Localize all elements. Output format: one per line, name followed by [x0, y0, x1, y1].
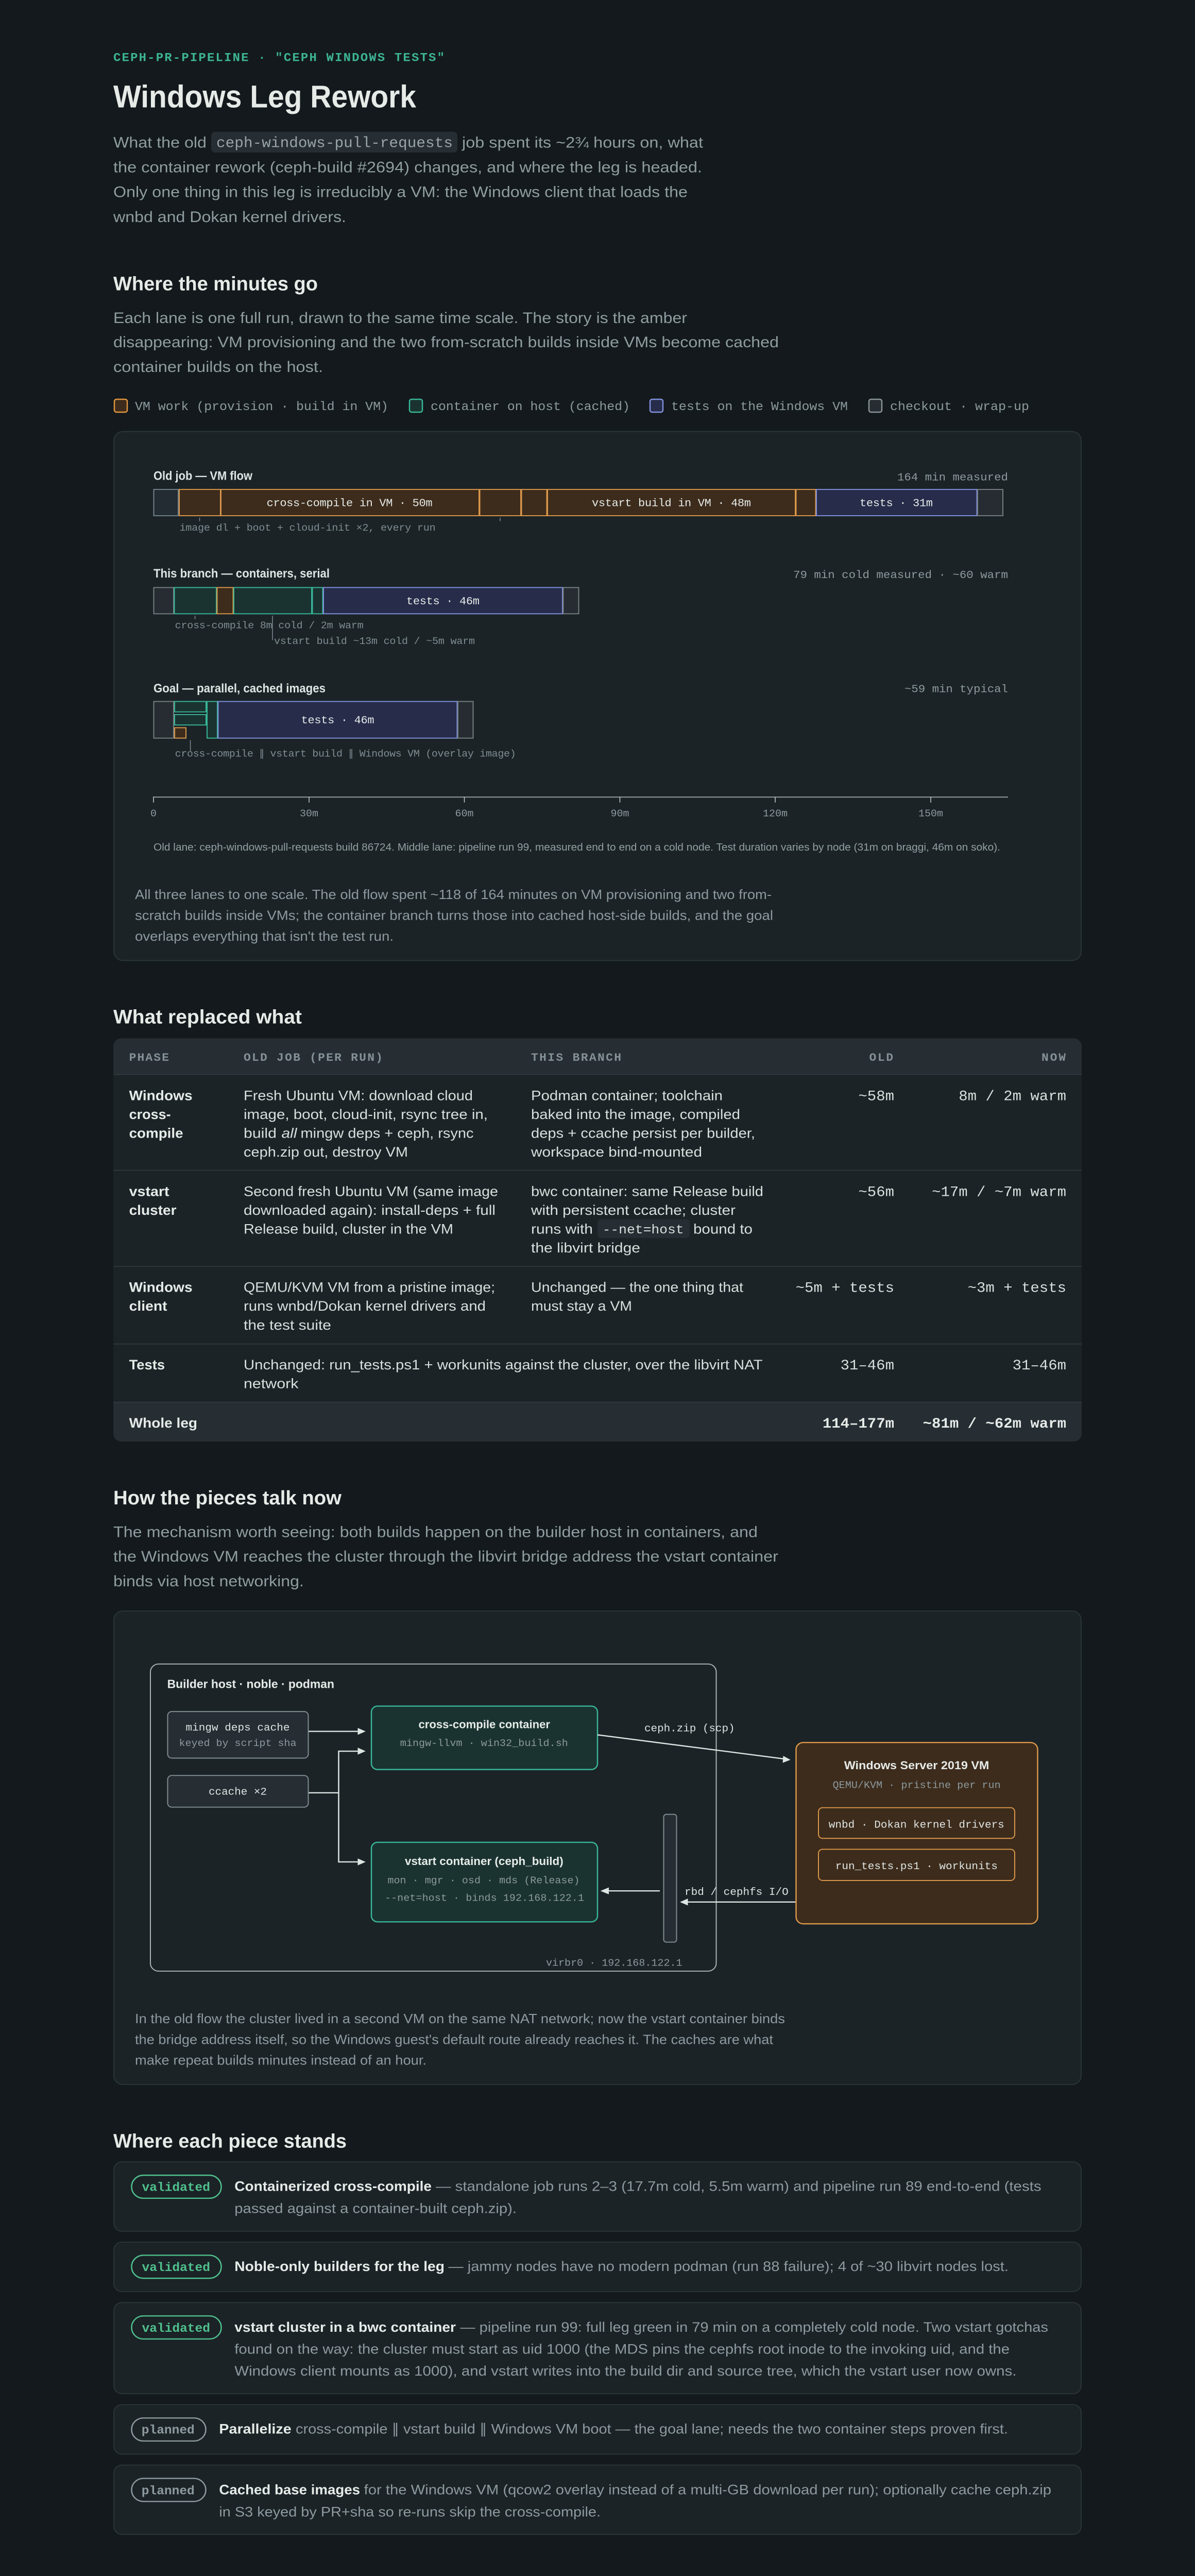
row: vstart cluster: Release build, cluster in the VM: [244, 1222, 453, 1237]
row: vstart cluster: runs with: [531, 1222, 593, 1237]
row: Windows cross-compile: Fresh Ubuntu VM: download cloud: [244, 1088, 473, 1103]
status card: containerized cross-compile: [114, 2162, 1081, 2231]
heading: Where the minutes go: [113, 273, 318, 295]
status card: vstart cluster in bwc container: — pipeline run 99: full leg green in 79 min on a completely cold node. Two vstart gotchas: [460, 2319, 1048, 2335]
status card: noble-only builders: Noble-only builders for the leg: [234, 2259, 445, 2274]
status card: containerized cross-compile: validated: [142, 2181, 210, 2195]
table header row: [129, 1052, 1066, 1064]
diagram caption: make repeat builds minutes instead of an hour.: [135, 2053, 426, 2068]
section intro text: disappearing: VM provisioning and the two from-scratch builds inside VMs become cached: [113, 334, 779, 351]
intro paragraph: wnbd and Dokan kernel drivers.: [113, 208, 346, 226]
cross-compile container box: [371, 1706, 598, 1770]
lane: goal: ~59 min typical: [904, 683, 1008, 696]
cross-compile container box: mingw-llvm · win32_build.sh: [400, 1738, 568, 1749]
lane: this branch: vstart build ~13m cold / ~5m warm: [274, 636, 475, 647]
lane: goal: tests · 46m: [301, 715, 374, 727]
panel: architecture diagram: [114, 1611, 1081, 2084]
row: vstart cluster: cluster: [129, 1203, 177, 1218]
vstart container box: --net=host · binds 192.168.122.1: [385, 1893, 584, 1904]
status card: cached base images: planned: [142, 2485, 195, 2498]
builder host box: [150, 1664, 716, 1971]
status card: noble-only builders: — jammy nodes have no modern podman (run 88 failure); 4 of ~30 libvirt nodes lost.: [448, 2259, 1009, 2274]
row: Windows cross-compile: build: [244, 1126, 277, 1141]
lane: old job: [153, 469, 1008, 534]
wnbd driver box: [818, 1808, 1015, 1838]
intro paragraph: What the old: [113, 134, 207, 151]
table header row: NOW: [1042, 1052, 1066, 1064]
table header row: OLD JOB (PER RUN): [244, 1052, 383, 1064]
ccache box: [168, 1775, 308, 1807]
lane: this branch: This branch — containers, serial: [153, 567, 330, 581]
row: tests: network: [244, 1376, 299, 1392]
lane: goal: cross-compile ∥ vstart build ∥ Windows VM (overlay image): [175, 749, 516, 759]
row: Windows cross-compile: all: [281, 1126, 298, 1141]
status card: vstart cluster in bwc container: validated: [142, 2322, 210, 2336]
diagram caption: [135, 2011, 785, 2068]
row: vstart cluster: the libvirt bridge: [531, 1241, 640, 1256]
arrow: bridge to vstart container: [601, 1887, 660, 1894]
status card: cached base images: for the Windows VM (qcow2 overlay instead of a multi-GB download per run); optionally cache ceph.zip: [364, 2482, 1051, 2497]
status card: vstart cluster in bwc container: [114, 2302, 1081, 2394]
section intro text: [113, 309, 779, 376]
legend: container on host (cached): [431, 401, 630, 414]
section: what replaced what: [113, 1006, 1082, 1442]
vstart container box: vstart container (ceph_build): [405, 1855, 564, 1868]
status card: containerized cross-compile: Containerized cross-compile: [234, 2178, 432, 2194]
status card: parallelize: Parallelize: [219, 2421, 292, 2436]
intro paragraph: [113, 132, 704, 226]
status card: containerized cross-compile: — standalone job runs 2–3 (17.7m cold, 5.5m warm) and pipeline run 89 end-to-end (tests: [436, 2178, 1042, 2194]
row: Windows client: runs wnbd/Dokan kernel drivers and: [244, 1299, 486, 1314]
legend: [114, 399, 1029, 414]
arrow: ceph.zip scp to Windows VM: ceph.zip (scp): [644, 1723, 735, 1735]
heading: What replaced what: [113, 1006, 302, 1028]
row: vstart cluster: Second fresh Ubuntu VM (same image: [244, 1184, 498, 1199]
row: tests: [129, 1358, 1066, 1392]
time axis: 30m: [300, 808, 318, 819]
intro paragraph: Only one thing in this leg is irreducibly a VM: the Windows client that loads the: [113, 183, 688, 201]
legend: tests on the Windows VM: [671, 401, 848, 414]
comparison table: [113, 1038, 1082, 1442]
status card: vstart cluster in bwc container: found on the way: the cluster must start as uid 1000 (the MDS pins the cephfs root inode to the invoking uid, and the: [234, 2341, 1010, 2357]
row: Windows client: Windows: [129, 1280, 193, 1295]
row: Windows cross-compile: 8m / 2m warm: [959, 1088, 1066, 1105]
status card: cached base images: Cached base images: [219, 2482, 360, 2497]
eyebrow: CEPH-PR-PIPELINE · "CEPH WINDOWS TESTS": [113, 52, 445, 65]
arrow: ceph.zip scp to Windows VM: [598, 1723, 791, 1763]
table header row: PHASE: [129, 1052, 169, 1064]
lane: old job: 164 min measured: [897, 471, 1008, 484]
diagram caption: In the old flow the cluster lived in a second VM on the same NAT network; now the vstart container binds: [135, 2011, 785, 2026]
row: vstart cluster: --net=host: [603, 1223, 684, 1238]
row: vstart cluster: downloaded again): install-deps + full: [244, 1203, 496, 1218]
builder host box: Builder host · noble · podman: [167, 1677, 334, 1690]
arrow: ccache to both containers: [309, 1748, 366, 1866]
section intro text: container builds on the host.: [113, 359, 323, 376]
chart caption: overlaps everything that isn't the test run.: [135, 928, 394, 944]
time axis: 150m: [918, 808, 943, 819]
status card: noble-only builders: validated: [142, 2262, 210, 2275]
row: tests: 31–46m: [841, 1358, 894, 1374]
lane: this branch: tests · 46m: [406, 596, 480, 608]
cross-compile container box: cross-compile container: [419, 1718, 550, 1731]
row: Windows client: ~5m + tests: [796, 1280, 894, 1297]
row: Windows cross-compile: mingw deps + ceph, rsync: [301, 1126, 474, 1141]
status card: containerized cross-compile: passed against a container-built ceph.zip).: [234, 2200, 517, 2216]
intro paragraph: job spent its ~2¾ hours on, what: [462, 134, 704, 151]
row: tests: Unchanged: run_tests.ps1 + workunits against the cluster, over the libvirt NAT: [244, 1358, 763, 1372]
row: Windows client: the test suite: [244, 1317, 331, 1333]
lane: this branch: [153, 567, 1008, 647]
time axis: 0: [150, 808, 157, 819]
row: Windows cross-compile: workspace bind-mounted: [531, 1145, 702, 1160]
row: Windows cross-compile: baked into the image, compiled: [531, 1107, 740, 1122]
status card: noble-only builders: [114, 2242, 1081, 2292]
lane: this branch: 79 min cold measured · ~60 warm: [793, 569, 1008, 582]
row: tests: 31–46m: [1013, 1358, 1066, 1374]
row: vstart cluster: ~56m: [858, 1184, 894, 1200]
row: Windows client: must stay a VM: [531, 1299, 632, 1314]
intro paragraph: ceph-windows-pull-requests: [216, 135, 453, 151]
section: how the pieces talk now: [113, 1487, 1081, 2084]
legend: checkout · wrap-up: [890, 401, 1029, 414]
lane: goal: Goal — parallel, cached images: [153, 682, 326, 696]
title: Windows Leg Rework: [113, 79, 416, 114]
row: vstart cluster: ~17m / ~7m warm: [932, 1184, 1066, 1200]
header block: [113, 52, 704, 226]
row: Windows cross-compile: cross-: [129, 1107, 171, 1122]
row: vstart cluster: [129, 1184, 1066, 1256]
row: Windows client: client: [129, 1299, 167, 1314]
row: vstart cluster: bound to: [693, 1222, 753, 1237]
row: vstart cluster: bwc container: same Release build: [531, 1184, 763, 1199]
Windows Server VM box: [796, 1742, 1037, 1924]
status card: parallelize: planned: [142, 2424, 195, 2437]
arrow: rbd and cephfs I/O to bridge: [680, 1887, 795, 1906]
mingw deps cache box: keyed by script sha: [179, 1738, 297, 1749]
section intro text: the Windows VM reaches the cluster through the libvirt bridge address the vstart container: [113, 1548, 778, 1565]
row: whole leg total: [129, 1416, 1066, 1432]
status card: parallelize: cross-compile ∥ vstart build ∥ Windows VM boot — the goal lane; needs the two container steps proven first.: [296, 2421, 1008, 2436]
lane: goal: [153, 682, 1008, 759]
time axis: 60m: [455, 808, 473, 819]
section intro text: The mechanism worth seeing: both builds happen on the builder host in containers, and: [113, 1523, 758, 1541]
panel: timeline chart: [114, 432, 1081, 960]
section intro text: Each lane is one full run, drawn to the same time scale. The story is the amber: [113, 309, 687, 327]
row: Windows cross-compile: ~58m: [858, 1088, 894, 1105]
row: Windows cross-compile: compile: [129, 1126, 183, 1141]
row: vstart cluster: vstart: [129, 1184, 169, 1199]
row: Windows client: Unchanged — the one thing that: [531, 1280, 744, 1295]
Windows Server VM box: Windows Server 2019 VM: [844, 1759, 989, 1772]
lane: old job: tests · 31m: [860, 498, 933, 510]
mingw deps cache box: [168, 1711, 308, 1758]
row: Windows cross-compile: deps + ccache persist per builder,: [531, 1126, 755, 1141]
status card: parallelize: [114, 2404, 1081, 2454]
wnbd driver box: wnbd · Dokan kernel drivers: [829, 1820, 1004, 1831]
row: tests: Tests: [129, 1358, 165, 1372]
lane: old job: Old job — VM flow: [153, 469, 253, 483]
mingw deps cache box: mingw deps cache: [185, 1722, 289, 1734]
status card: vstart cluster in bwc container: Windows client mounts as 1000), and vstart writes into the build dir and source tree, which the vstart user now owns.: [234, 2363, 1017, 2379]
status card: cached base images: [114, 2465, 1081, 2534]
lane: old job: vstart build in VM · 48m: [592, 498, 751, 510]
vstart container box: [371, 1842, 598, 1922]
chart caption: All three lanes to one scale. The old flow spent ~118 of 164 minutes on VM provisioning and two from-: [135, 887, 772, 902]
diagram caption: the bridge address itself, so the Windows guest's default route already reaches it. The caches are what: [135, 2032, 774, 2047]
vstart container box: mon · mgr · osd · mds (Release): [387, 1875, 580, 1886]
heading: How the pieces talk now: [113, 1487, 342, 1509]
time axis: 90m: [611, 808, 629, 819]
legend: VM work (provision · build in VM): [135, 401, 388, 414]
status card: cached base images: in S3 keyed by PR+sha so re-runs skip the cross-compile.: [219, 2504, 601, 2519]
status card: vstart cluster in bwc container: vstart cluster in a bwc container: [234, 2319, 456, 2335]
chart caption: [135, 887, 773, 944]
row: Windows client: [129, 1280, 1066, 1333]
chart footnote: Old lane: ceph-windows-pull-requests build 86724. Middle lane: pipeline run 99, measured end to end on a cold node. Test duration varies by node (31m on braggi, 46m on soko).: [153, 841, 1000, 853]
row: whole leg total: 114–177m: [823, 1416, 894, 1432]
time axis: [150, 797, 1008, 819]
run_tests box: [818, 1849, 1015, 1880]
row: whole leg total: ~81m / ~62m warm: [923, 1416, 1066, 1432]
row: Windows cross-compile: [129, 1088, 1066, 1160]
table header row: OLD: [869, 1052, 893, 1064]
chart caption: scratch builds inside VMs; the container branch turns those into cached host-side builds, and the goal: [135, 908, 773, 923]
heading: Where each piece stands: [113, 2130, 347, 2152]
ccache box: ccache ×2: [209, 1787, 267, 1799]
row: Windows cross-compile: image, boot, cloud-init, rsync tree in,: [244, 1107, 488, 1122]
lane: old job: cross-compile in VM · 50m: [267, 498, 433, 510]
row: whole leg total: Whole leg: [129, 1416, 197, 1431]
time axis: 120m: [763, 808, 788, 819]
run_tests box: run_tests.ps1 · workunits: [835, 1861, 998, 1873]
row: Windows cross-compile: Windows: [129, 1088, 193, 1103]
row: vstart cluster: with persistent ccache; cluster: [531, 1203, 736, 1218]
lane: this branch: cross-compile 8m cold / 2m warm: [175, 620, 364, 632]
table header row: THIS BRANCH: [531, 1052, 621, 1064]
row: Windows cross-compile: Podman container; toolchain: [531, 1088, 723, 1103]
row: Windows client: ~3m + tests: [968, 1280, 1066, 1297]
row: Windows client: QEMU/KVM VM from a pristine image;: [244, 1280, 495, 1295]
arrow: rbd and cephfs I/O to bridge: rbd / cephfs I/O: [685, 1887, 789, 1899]
row: Windows cross-compile: ceph.zip out, destroy VM: [244, 1145, 408, 1160]
section: where the minutes go: [113, 273, 1081, 960]
section: where each piece stands: [113, 2130, 1081, 2534]
section intro text: binds via host networking.: [113, 1572, 304, 1590]
virbr0 bridge bar: [663, 1815, 677, 1942]
arrow: mingw cache to cross-compile: [309, 1728, 366, 1735]
builder host box: virbr0 · 192.168.122.1: [546, 1958, 682, 1969]
section intro text: [113, 1523, 778, 1590]
Windows Server VM box: QEMU/KVM · pristine per run: [833, 1780, 1001, 1791]
intro paragraph: the container rework (ceph-build #2694) changes, and where the leg is headed.: [113, 159, 702, 176]
lane: old job: image dl + boot + cloud-init ×2, every run: [180, 522, 436, 534]
